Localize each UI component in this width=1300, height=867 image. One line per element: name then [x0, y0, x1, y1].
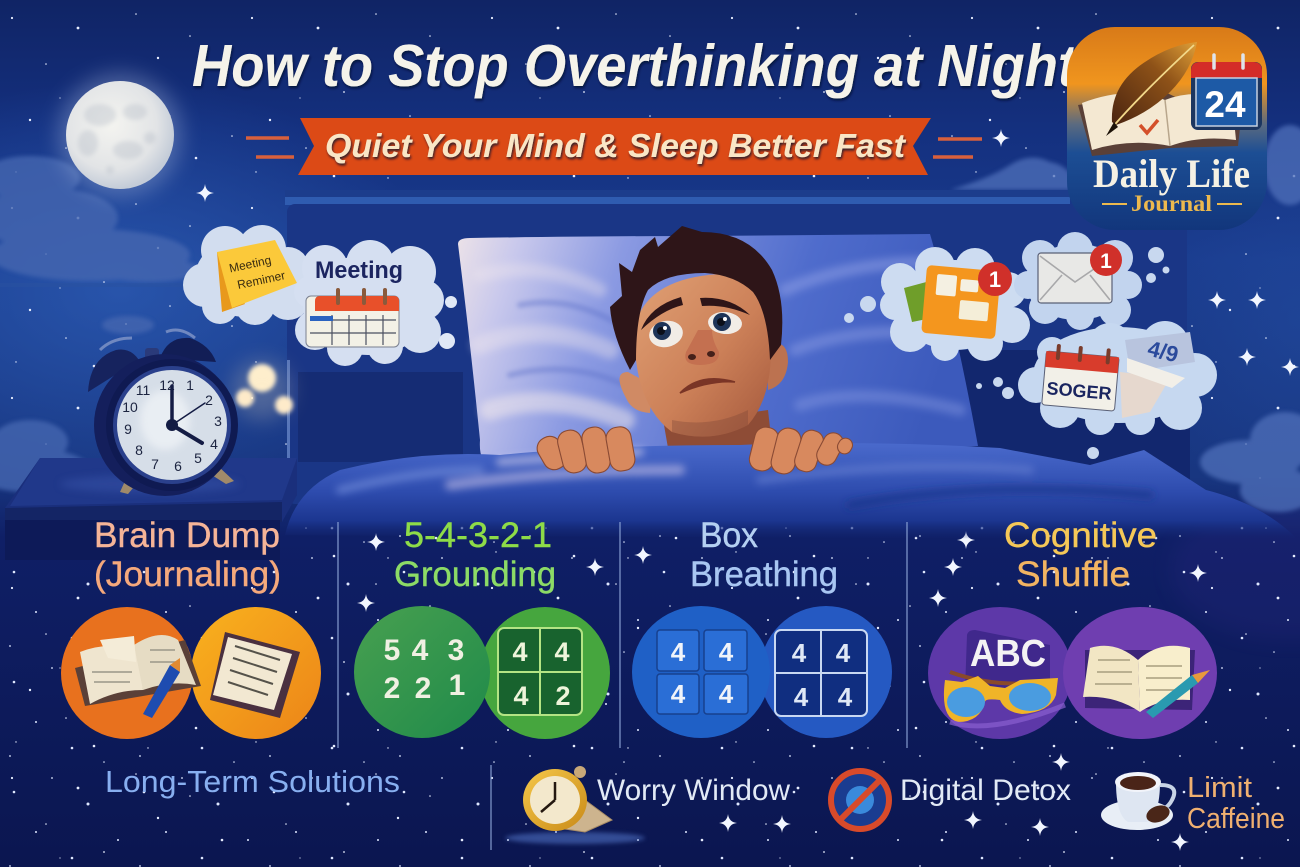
- date calendar: [1191, 55, 1262, 130]
- label: Digital Detox: [900, 774, 1071, 807]
- yellow sticky note: Remimer: [236, 268, 286, 292]
- heading: [394, 516, 556, 594]
- heading: [690, 516, 838, 594]
- date calendar: 24: [1204, 84, 1246, 125]
- clock numerals: 6: [174, 458, 182, 474]
- icon: countdown numbers: 1: [449, 669, 465, 702]
- right ear: [768, 343, 788, 390]
- icon: blue tiles: 4: [671, 637, 686, 667]
- notification badge: [978, 262, 1012, 296]
- panel: cognitive shuffle: [928, 516, 1217, 739]
- eyebrows: [641, 297, 750, 330]
- thought bubbles on the right: [844, 247, 1170, 459]
- calendar: soger: SOGER: [1046, 378, 1112, 404]
- blanket: [285, 443, 1298, 540]
- icon: open book with pencil: [1083, 646, 1210, 718]
- clock numerals: 10: [122, 399, 138, 415]
- icon: book page: [210, 632, 300, 718]
- notification badge: 1: [989, 267, 1001, 292]
- window light orbs: [232, 360, 293, 420]
- yellow sticky note: Meeting: [228, 253, 273, 275]
- subtitle ribbon: Quiet Your Mind & Sleep Better Fast: [325, 127, 907, 164]
- panel: 5-4-3-2-1 grounding: [354, 516, 610, 739]
- hands gripping blanket: [533, 425, 855, 476]
- open book: [1078, 92, 1240, 156]
- icon: abc card: [965, 630, 1050, 690]
- legs: [120, 466, 234, 494]
- label: [1187, 772, 1285, 835]
- headboard: [287, 204, 1190, 504]
- icon: sunglasses: [944, 672, 1065, 726]
- clock hands: [172, 386, 205, 443]
- heading: Grounding: [394, 555, 556, 594]
- icon: breathing grid: 4: [836, 638, 851, 668]
- mouth: [680, 379, 735, 393]
- icon: number grid: 2: [555, 681, 571, 711]
- icon: countdown numbers: 4: [412, 634, 429, 667]
- clock numerals: 7: [151, 456, 159, 472]
- clock numerals: [122, 377, 222, 474]
- label: Worry Window: [597, 774, 791, 807]
- heading: 5-4-3-2-1: [404, 516, 552, 555]
- nose: [685, 330, 719, 365]
- chin shadow: [672, 410, 748, 437]
- feather quill: [1106, 42, 1197, 136]
- clock numerals: 9: [124, 421, 132, 437]
- thought cloud: deadline calendar: [1018, 321, 1217, 435]
- icon: pocket clock: [505, 766, 645, 844]
- heading: Cognitive: [1004, 516, 1157, 555]
- clock body: [94, 354, 236, 496]
- label: Caffeine: [1187, 803, 1285, 835]
- left hand: [533, 425, 637, 475]
- clock numerals: 5: [194, 450, 202, 466]
- envelope: [1038, 253, 1112, 303]
- green card: [904, 281, 932, 322]
- heading: Box: [700, 516, 758, 555]
- logo sub-wordmark: [1102, 191, 1242, 216]
- icon: countdown numbers: 2: [384, 672, 400, 705]
- icon: breathing grid: 4: [794, 682, 809, 712]
- thought cloud: meeting calendar: [294, 240, 457, 366]
- horizon band: [0, 190, 1070, 287]
- clock numerals: 8: [135, 442, 143, 458]
- orange board: [921, 265, 1001, 339]
- item: worry window: [505, 766, 791, 844]
- hair: [610, 226, 782, 370]
- subtitle ribbon: [246, 118, 982, 175]
- long-term solutions heading: Long-Term Solutions: [105, 764, 400, 799]
- thought cloud: meeting reminder: [183, 225, 310, 325]
- nightstand: [5, 458, 297, 560]
- clouds on the right: [950, 125, 1300, 512]
- icon: breathing grid: [775, 630, 867, 716]
- clock numerals: 1: [186, 377, 194, 393]
- icon: blue tiles: [657, 630, 748, 714]
- logo sub-wordmark: Journal: [1131, 191, 1212, 216]
- calendar: soger: [1042, 345, 1120, 411]
- left ear: [619, 372, 652, 413]
- clock numerals: 3: [214, 413, 222, 429]
- technique divider lines: [338, 522, 907, 850]
- thought cloud: task board: [880, 247, 1030, 361]
- icon: breathing grid: 4: [838, 682, 853, 712]
- eyes: [647, 311, 743, 350]
- icon: blue tiles: 4: [719, 679, 734, 709]
- item: digital detox: [831, 771, 1071, 829]
- worried man in bed: [610, 226, 788, 448]
- icon: countdown numbers: 2: [415, 672, 431, 705]
- bells: [88, 349, 139, 392]
- calendar icon: [306, 290, 399, 347]
- title: How to Stop Overthinking at Night: [192, 33, 1078, 99]
- purple circles: [928, 607, 1217, 739]
- right hand: [747, 425, 855, 476]
- label: Meeting: [315, 257, 403, 284]
- heading: [94, 516, 281, 594]
- torn papers: [1120, 332, 1195, 418]
- orange circles: [61, 607, 321, 739]
- icon: abc card: ABC: [970, 633, 1046, 675]
- clock numerals: 4: [210, 436, 218, 452]
- icon: no phone sign: [831, 771, 889, 829]
- moon: [58, 73, 182, 197]
- icon: blue tiles: 4: [671, 679, 686, 709]
- icon: countdown numbers: 5: [384, 634, 400, 667]
- check mark: [1140, 120, 1158, 133]
- heading: [1004, 516, 1157, 594]
- panel: brain dump journaling: [61, 516, 321, 739]
- heading: (Journaling): [94, 555, 281, 594]
- clouds on the left: [0, 156, 200, 492]
- heading: Breathing: [690, 555, 838, 594]
- icon: coffee cup: [1101, 772, 1174, 830]
- clock numerals: 11: [136, 382, 150, 398]
- icon: number grid: [498, 628, 582, 715]
- torn papers: 4/9: [1145, 336, 1181, 367]
- logo: daily life journal: [1067, 27, 1267, 230]
- icon: blue tiles: 4: [719, 637, 734, 667]
- icon: number grid: 4: [554, 637, 570, 667]
- item: limit caffeine: [1101, 772, 1285, 835]
- icon: breathing grid: 4: [792, 638, 807, 668]
- notification badge: 1: [1100, 250, 1112, 273]
- green circles: [354, 606, 610, 739]
- icon: open journal with pen: [75, 635, 201, 718]
- yellow sticky note: [217, 240, 297, 312]
- sparkle stars: [196, 129, 1299, 851]
- panel: box breathing: [632, 516, 892, 738]
- label: Limit: [1187, 772, 1252, 804]
- alarm clock: [88, 330, 238, 496]
- heading: Brain Dump: [94, 516, 280, 555]
- icon: countdown numbers: [384, 634, 465, 705]
- pillow: [458, 234, 978, 464]
- blue circles: [632, 606, 892, 738]
- icon: number grid: 4: [513, 681, 529, 711]
- clock numerals: 2: [205, 392, 213, 408]
- thought cloud: email: [1014, 232, 1142, 330]
- neck: [664, 410, 772, 448]
- icon: countdown numbers: 3: [448, 634, 464, 667]
- clock numerals: 12: [159, 377, 175, 393]
- logo wordmark: Daily Life: [1093, 151, 1250, 196]
- heading: Shuffle: [1016, 555, 1130, 594]
- face: [636, 274, 771, 437]
- icon: number grid: 4: [512, 637, 528, 667]
